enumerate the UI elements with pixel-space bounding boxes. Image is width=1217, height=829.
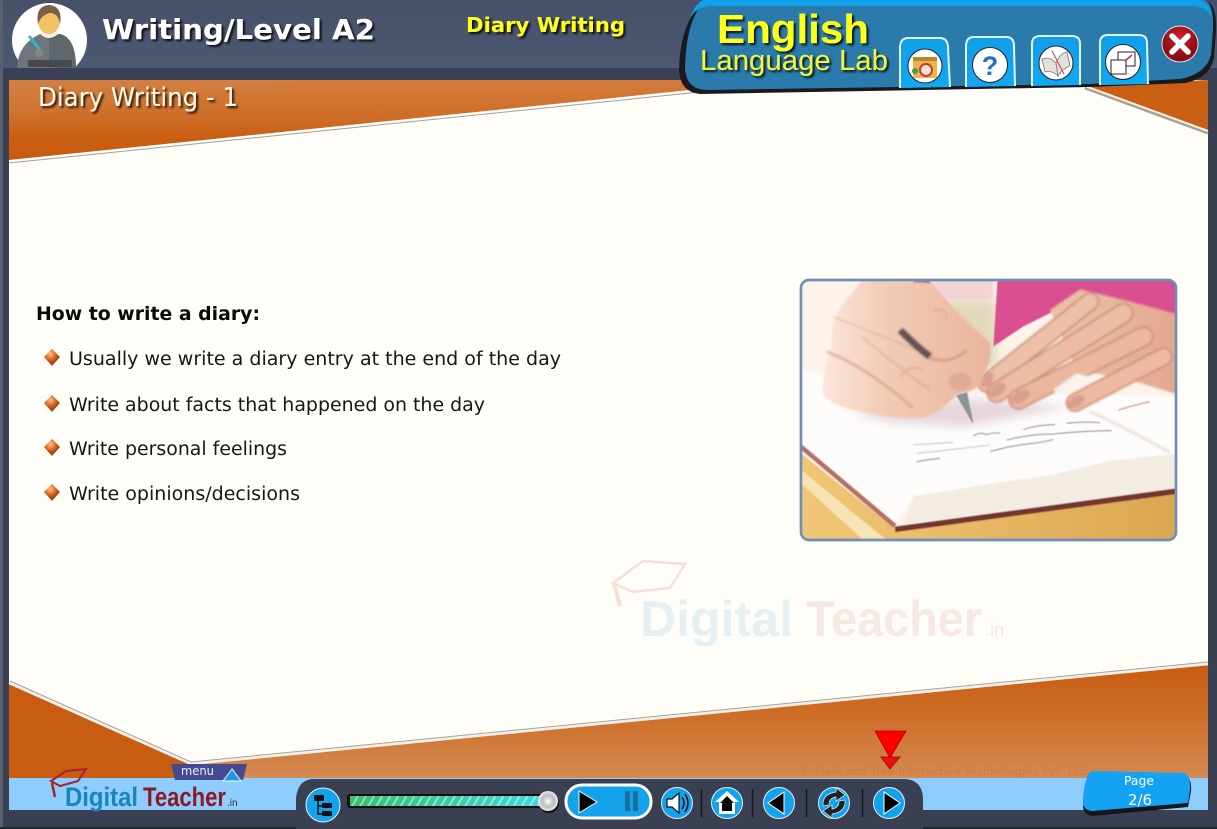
table — [801, 453, 1180, 542]
logo: digital teacher: .in — [227, 798, 238, 809]
logo: digital teacher — [51, 769, 238, 812]
play pause control — [566, 785, 651, 818]
left hand — [823, 280, 991, 418]
icon: replay button — [818, 788, 850, 818]
icon: timer folder tab — [900, 38, 950, 88]
page block — [903, 453, 1180, 524]
icon: back button — [764, 788, 794, 818]
menu tab: menu — [181, 764, 214, 778]
icon: tree menu button — [306, 788, 340, 822]
watermark: digital teacher: Teacher — [806, 591, 982, 647]
icon: window tab — [1100, 35, 1148, 85]
bullet item 2: Write about facts that happened on the day — [69, 395, 485, 416]
title: writing level: Writing/Level A2 — [102, 13, 375, 46]
panel: english language lab — [679, 0, 1216, 94]
icon: help tab — [966, 37, 1015, 87]
page indicator — [1083, 771, 1191, 816]
page indicator: 2/6 — [1128, 791, 1152, 809]
text block: how to write a diary — [36, 303, 561, 505]
slide heading: Diary Writing - 1 — [38, 83, 238, 113]
icon: volume button — [662, 788, 692, 818]
book page — [801, 370, 1180, 523]
photo: hand writing in a diary — [801, 280, 1180, 542]
icon: help tab: ? — [982, 51, 998, 81]
book cover — [801, 447, 895, 526]
bullet item 1: Usually we write a diary entry at the end of the day — [69, 349, 561, 370]
watermark: digital teacher — [613, 561, 1004, 647]
icon: close button — [1162, 26, 1198, 62]
icon: book tab — [1032, 36, 1080, 86]
control panel — [296, 779, 923, 829]
top left orange banner — [9, 80, 700, 163]
footer band — [0, 778, 1217, 829]
watermark: digital teacher: .in — [985, 620, 1004, 640]
pen nib — [956, 392, 974, 423]
list heading: How to write a diary: — [36, 303, 260, 325]
right hand — [978, 289, 1180, 411]
bottom orange band — [9, 662, 1208, 778]
handwriting — [913, 402, 1150, 462]
copyright text: © Dale and Tree Interactive Technologies Pvt. Ltd. — [800, 765, 1090, 778]
top right orange corner — [1085, 80, 1208, 133]
heading: diary writing: Diary Writing — [466, 13, 625, 37]
logo: digital teacher: Teacher — [143, 782, 226, 812]
watermark: digital teacher: Digital — [640, 591, 793, 647]
icon: next button — [874, 788, 904, 818]
page indicator: Page — [1124, 774, 1154, 788]
page gutter — [1090, 412, 1170, 453]
bullet item 4: Write opinions/decisions — [69, 484, 300, 505]
avatar icon — [12, 3, 87, 68]
red triangle markers — [875, 731, 906, 769]
progress slider — [347, 791, 559, 813]
icon: home button — [712, 788, 742, 818]
logo: digital teacher: Digital — [65, 782, 138, 812]
english text: English — [717, 6, 869, 52]
bullet item 3: Write personal feelings — [69, 439, 287, 460]
language lab text: Language Lab — [700, 45, 888, 77]
menu tab — [171, 764, 247, 781]
